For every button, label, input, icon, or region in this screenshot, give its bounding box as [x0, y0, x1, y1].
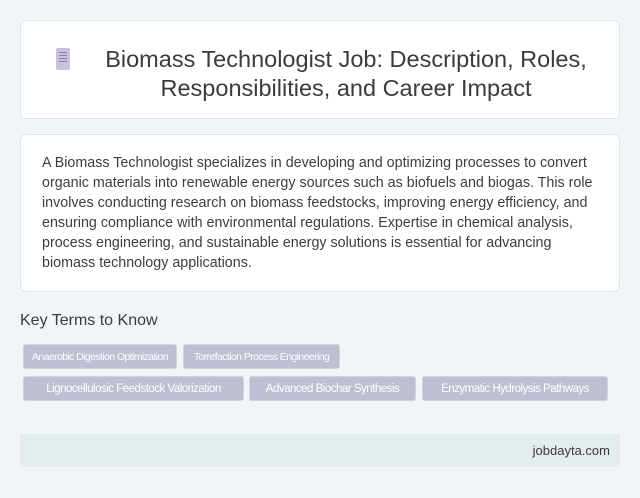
tag 4: Advanced Biochar Synthesis	[266, 383, 399, 395]
title: Biomass Technologist Job: Description, Roles, Responsibilities, and Career Impact	[105, 46, 587, 101]
key terms heading: Key Terms to Know	[20, 312, 158, 329]
tag 1	[23, 344, 177, 369]
tag 1: Anaerobic Digestion Optimization	[32, 351, 168, 363]
tag 2	[183, 344, 340, 369]
description text: A Biomass Technologist specializes in developing and optimizing processes to convert organic materials into renewable energy sources such as biofuels and biogas. This role involves conducting research on biomass feedstocks, improving energy efficiency, and ensuring compliance with environmental regulations. Expertise in chemical analysis, process engineering, and sustainable energy solutions is essential for advancing biomass technology applications.	[42, 155, 592, 271]
tag 4	[249, 376, 416, 401]
tag 3: Lignocellulosic Feedstock Valorization	[46, 383, 221, 395]
header card	[20, 20, 620, 119]
tag 3	[23, 376, 244, 401]
footer	[20, 434, 620, 467]
tag 5: Enzymatic Hydrolysis Pathways	[441, 383, 589, 395]
footer text: jobdayta.com	[533, 443, 610, 458]
description card	[20, 134, 620, 292]
tag 5	[422, 376, 608, 401]
tag 2: Torrefaction Process Engineering	[194, 351, 329, 363]
icon: document	[56, 48, 70, 70]
